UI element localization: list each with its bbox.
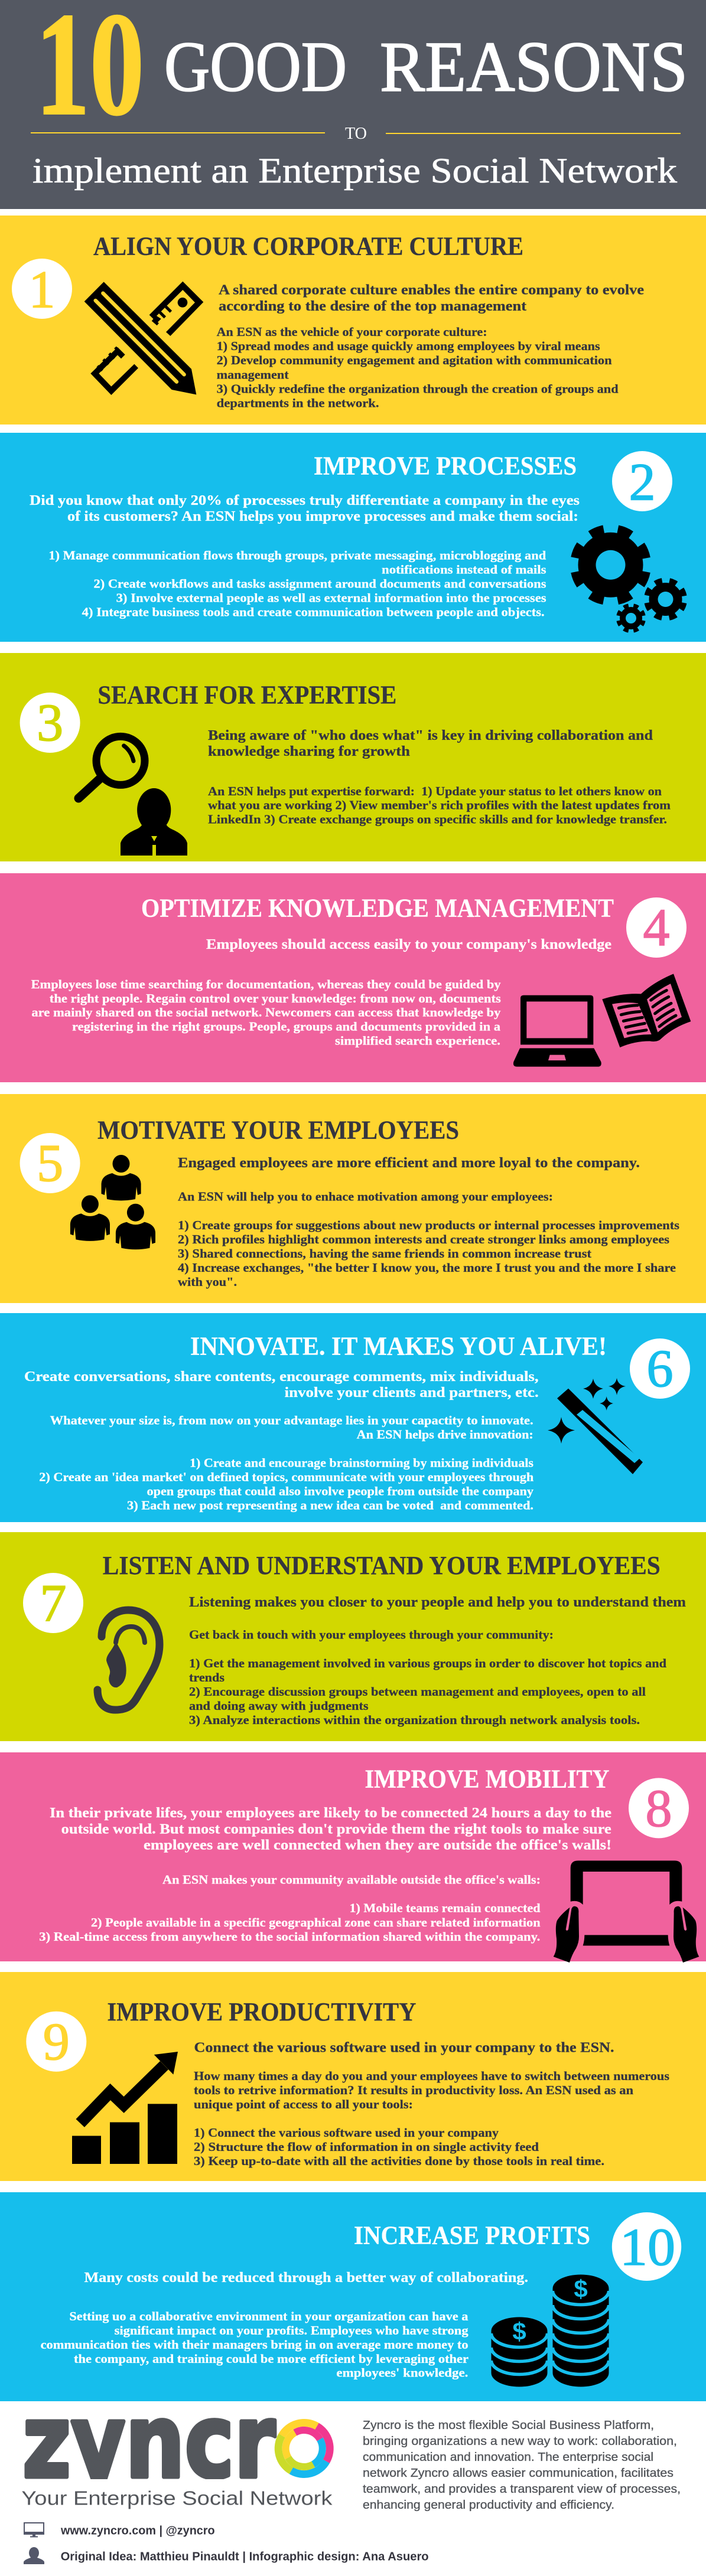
body text: notifications instead of mails [382,563,546,577]
panel 10: increase profits [0,2192,706,2401]
number badge [626,897,687,958]
body text: 1) Mobile teams remain connected [350,1901,541,1915]
company description: Zyncro is the most flexible Social Business Platform, [363,2419,654,2432]
body text: employees' knowledge. [336,2365,468,2379]
credits: Original Idea: Matthieu Pinauldt | Infographic design: Ana Asuero [61,2551,429,2564]
body text: Whatever your size is, from now on your advantage lies in your capactity to innovate. [50,1413,533,1427]
body text: 1) Spread modes and usage quickly among employees by viral means [217,339,600,353]
number badge [629,1778,689,1838]
icon: ear [97,1610,160,1710]
body text: 1) Get the management involved in various groups in order to discover hot topics and [189,1656,666,1670]
intro text: Connect the various software used in your company to the ESN. [194,2040,614,2055]
body text: 2) Rich profiles highlight common interests and create stronger links among employees [178,1232,669,1246]
body text [217,325,619,410]
body text: management [217,367,289,381]
number badge [12,259,72,319]
heading: INNOVATE. IT MAKES YOU ALIVE! [190,1332,607,1361]
intro text: Listening makes you closer to your people and help you to understand them [189,1595,686,1610]
heading: IMPROVE PRODUCTIVITY [107,1997,416,2026]
body text: 4) Increase exchanges, "the better I know you, the more I trust you and the more I share [178,1261,676,1275]
company description [363,2419,681,2512]
intro text: Create conversations, share contents, encourage comments, mix individuals, [24,1369,539,1385]
icon: magic wand and stars [548,1378,643,1474]
number badge [20,693,80,753]
header [0,0,706,209]
heading: INCREASE PROFITS [354,2221,590,2250]
body text: 3) Analyze interactions within the organization through network analysis tools. [189,1713,640,1727]
icon: person [24,2547,44,2564]
body text: 3) Involve external people as well as external information into the processes [116,590,546,605]
body text [208,784,671,827]
title: good reasons: REASONS [380,27,688,106]
logo ring [269,2414,339,2483]
body text: departments in the network. [217,396,379,410]
body text: 3) Shared connections, having the same friends in common increase trust [178,1246,591,1261]
body text: unique point of access to all your tools: [194,2097,413,2111]
number badge [23,1573,83,1633]
heading: ALIGN YOUR CORPORATE CULTURE [93,232,523,261]
body text: communication ties with their managers bring in on average more money to [41,2337,469,2352]
icon: stacks of coins: $ [512,2317,526,2345]
icon: laptop [513,995,601,1067]
body text: open groups that could also involve people from outside the company [147,1484,534,1498]
body text: 3) Keep up-to-date with all the activities done by those tools in real time. [194,2154,604,2168]
number badge: 9 [43,2013,70,2071]
icon: gears [569,523,687,633]
panel 4: optimize knowledge management [0,873,706,1082]
number badge: 4 [643,899,670,957]
number badge: 5 [37,1134,63,1193]
body text: 2) Create workflows and tasks assignment around documents and conversations [93,577,546,591]
panel 8: improve mobility [0,1752,706,1963]
tagline: Your Enterprise Social Network [21,2487,333,2509]
intro text: Being aware of "who does what" is key in driving collaboration and [208,728,653,743]
icon: monitor [24,2522,44,2538]
body text: and doing away with judgments [189,1699,369,1713]
heading: LISTEN AND UNDERSTAND YOUR EMPLOYEES [103,1551,661,1580]
panel 9: improve productivity [0,1972,706,2181]
number badge: 1 [28,261,56,319]
panel 2: improve processes [0,433,706,642]
body text: An ESN helps put expertise forward: 1) Update your status to let others know on [208,784,662,798]
body text: An ESN makes your community available outside the office's walls: [162,1873,541,1887]
body text: simplified search experience. [335,1033,500,1047]
company description: communication and innovation. The enterprise social [363,2451,653,2464]
body text: 2) Structure the flow of information in on single activity feed [194,2140,539,2154]
body text: trends [189,1670,225,1684]
body text [39,1413,534,1513]
body text: 4) Integrate business tools and create communication between people and objects. [82,605,545,619]
intro text: involve your clients and partners, etc. [285,1385,539,1400]
body text [189,1628,666,1727]
number badge [612,451,672,511]
number badge [630,1338,690,1399]
number badge [26,2012,86,2072]
body text: 2) People available in a specific geographical zone can share related information [91,1915,541,1929]
company description: network Zyncro allows easier communication, facilitates [363,2467,674,2480]
intro text: knowledge sharing for growth [208,744,410,759]
number badge: 10 [620,2218,675,2277]
number badge [20,1133,80,1193]
body text [48,548,546,619]
title: good reasons [164,27,688,106]
icon: growth chart with arrow [72,2052,178,2164]
body text [39,1873,541,1944]
zyncro logo [24,2418,334,2479]
body text: 1) Manage communication flows through groups, private messaging, microblogging and [48,548,546,563]
body text: How many times a day do you and your employees have to switch between numerous [194,2069,669,2083]
icon: hands holding tablet [554,1860,699,1963]
icon: pencil and ruler [84,282,203,395]
body text: An ESN will help you to enhace motivation among your employees: [178,1190,553,1204]
body text: 2) Encourage discussion groups between management and employees, open to all [189,1684,646,1699]
heading: MOTIVATE YOUR EMPLOYEES [97,1115,459,1144]
intro text [208,728,653,759]
body text: significant impact on your profits. Employees who have strong [115,2323,469,2337]
heading: SEARCH FOR EXPERTISE [97,680,396,709]
intro text: outside world. But most companies don't provide them the right tools to make sure [61,1822,611,1837]
body text: Employees lose time searching for documentation, whereas they could be guided by [31,977,501,991]
body text: LinkedIn 3) Create exchange groups on specific skills and for knowledge transfer. [208,812,667,827]
icon: stacks of coins: $ [574,2275,588,2303]
body text: 3) Each new post representing a new idea can be voted and commented. [127,1498,533,1513]
icon: team of people [70,1155,155,1249]
body text: 3) Real-time access from anywhere to the social information shared within the company. [39,1929,540,1944]
number badge [612,2212,681,2281]
panel 6: innovate [0,1313,706,1522]
body text: An ESN helps drive innovation: [357,1427,533,1441]
heading: IMPROVE PROCESSES [314,452,577,481]
intro text: Many costs could be reduced through a better way of collaborating. [84,2270,528,2286]
body text [178,1190,679,1289]
body text [41,2309,469,2379]
number badge: 8 [645,1780,672,1838]
body text: tools to retrive information? It results in productivity loss. An ESN used as an [194,2083,633,2097]
intro text: Employees should access easily to your company's knowledge [206,937,611,952]
body text: Get back in touch with your employees through your community: [189,1628,554,1642]
footer [22,2418,679,2564]
panel 1: align your corporate culture [0,216,706,425]
intro text [24,1369,539,1400]
intro text [30,493,580,524]
body text [31,977,501,1047]
body text: 2) Create an 'idea market' on defined topics, communicate with your employees through [39,1470,534,1484]
subtitle: implement an Enterprise Social Network [32,151,677,190]
body text: 2) Develop community engagement and agitation with communication [217,353,612,367]
company description: bringing organizations a new way to work: collaboration, [363,2435,677,2448]
intro text: Did you know that only 20% of processes truly differentiate a company in the eyes [30,493,580,508]
zyncro logo: zyncr [22,2382,275,2501]
icon: stacks of coins [492,2274,609,2386]
intro text: of its customers? An ESN helps you improve processes and make them social: [67,509,578,524]
body text: are mainly shared on the social network. Newcomers can access that knowledge by [31,1005,501,1020]
intro text: according to the desire of the top management [219,299,526,314]
panel 5: motivate your employees [0,1094,706,1303]
body text [194,2069,669,2168]
icon: open book [602,974,691,1047]
intro text: Engaged employees are more efficient and more loyal to the company. [178,1155,640,1171]
intro text [219,282,644,314]
body text: An ESN as the vehicle of your corporate culture: [217,325,487,339]
number badge: 2 [629,453,656,511]
body text: 1) Connect the various software used in your company [194,2126,499,2140]
body text: with you". [178,1275,237,1289]
company description: enhancing general productivity and efficiency. [363,2499,614,2512]
body text: Setting uo a collaborative environment in your organization can have a [69,2309,469,2323]
icon: magnifier and person [79,736,187,856]
intro text [50,1806,611,1853]
title: good reasons: GOOD [164,27,347,106]
number badge: 6 [646,1340,674,1398]
body text: the company, and training could be more efficient by leveraging other [74,2352,469,2366]
panel 3: search for expertise [0,653,706,861]
intro text: In their private lifes, your employees are likely to be connected 24 hours a day to the [50,1806,611,1821]
website: www.zyncro.com | @zyncro [60,2525,215,2538]
body text: registering in the right groups. People, groups and documents provided in a [72,1020,501,1034]
body text: the right people. Regain control over your knowledge: from now on, documents [50,991,501,1005]
intro text: employees are well connected when they are outside the office's walls! [144,1837,611,1853]
company description: teamwork, and provides a transparent view of processes, [363,2483,681,2496]
number badge: 7 [40,1574,66,1633]
intro text: A shared corporate culture enables the entire company to evolve [219,282,644,298]
panel 7: listen and understand [0,1532,706,1741]
body text: what you are working 2) View member's rich profiles with the latest updates from [208,798,671,812]
heading: OPTIMIZE KNOWLEDGE MANAGEMENT [141,893,614,922]
body text: 1) Create groups for suggestions about new products or internal processes improvements [178,1218,679,1232]
number badge: 3 [37,694,63,752]
title: to: TO [345,124,367,143]
heading: IMPROVE MOBILITY [365,1764,609,1794]
body text: 3) Quickly redefine the organization through the creation of groups and [217,381,619,396]
body text: 1) Create and encourage brainstorming by mixing individuals [190,1456,533,1470]
